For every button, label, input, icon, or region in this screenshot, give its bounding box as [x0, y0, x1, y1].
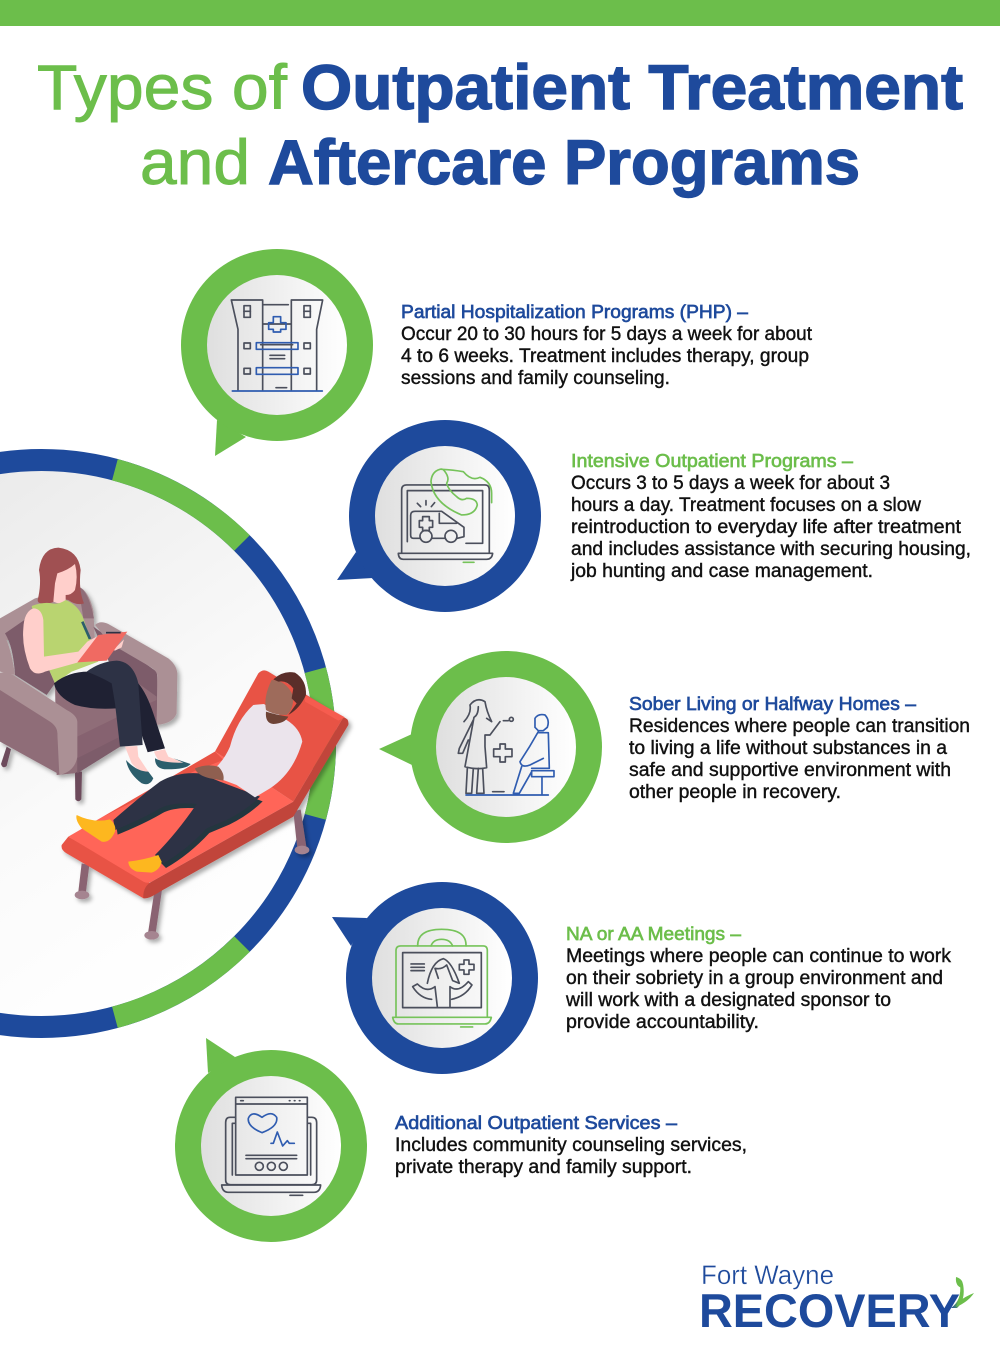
panel: partial hospitalization programs	[181, 249, 813, 456]
therapist figure	[23, 548, 191, 784]
text: additional services	[395, 1112, 747, 1178]
text: IOP	[570, 450, 971, 582]
text: PHP: Partial Hospitalization Programs (PHP) –	[401, 301, 749, 322]
chaise lounge	[62, 670, 348, 940]
icon: laptop with telehealth counselor	[393, 929, 491, 1027]
patient figure	[76, 672, 306, 873]
logo: Fort Wayne Recovery: Fort Wayne	[701, 1260, 834, 1290]
speech bubble: blue	[332, 882, 538, 1074]
panel: additional outpatient services	[175, 1038, 747, 1242]
text: IOP: Intensive Outpatient Programs –	[571, 450, 854, 471]
top banner bar	[0, 0, 1000, 26]
logo: Fort Wayne Recovery	[699, 1260, 974, 1337]
text: IOP: hours a day. Treatment focuses on a slow	[571, 495, 921, 516]
text: sober living	[629, 693, 970, 803]
icon: hospital building	[231, 300, 323, 391]
text: IOP: reintroduction to everyday life after treatment	[571, 517, 962, 538]
title	[37, 53, 963, 198]
armchair	[0, 587, 177, 801]
illustration: patient on chaise lounge	[62, 670, 348, 940]
speech bubble: blue	[337, 420, 541, 612]
text: sober living: safe and supportive environment with	[629, 760, 951, 781]
title: Types of	[37, 53, 288, 123]
text: IOP: Occurs 3 to 5 days a week for about 3	[571, 473, 890, 494]
icon: doctor and seated patient	[458, 700, 554, 795]
text: PHP: 4 to 6 weeks. Treatment includes therapy, group	[401, 346, 809, 367]
panel: intensive outpatient programs	[337, 420, 971, 612]
title: Aftercare Programs	[268, 128, 860, 198]
panel: large therapy circle	[0, 460, 348, 1027]
panel: NA or AA meetings	[332, 882, 951, 1074]
text: NA or AA	[565, 923, 951, 1033]
text: additional services: private therapy and family support.	[395, 1157, 692, 1178]
text: NA or AA: provide accountability.	[566, 1012, 759, 1033]
panel: sober living or halfway homes	[379, 651, 970, 843]
icon: sprout leaf	[951, 1277, 974, 1308]
text: sober living: Residences where people can transition	[629, 716, 970, 737]
text: sober living: Sober Living or Halfway Homes –	[629, 693, 917, 714]
text: PHP	[401, 301, 813, 389]
text: NA or AA: will work with a designated sponsor to	[565, 990, 891, 1011]
text: PHP: Occur 20 to 30 hours for 5 days a week for about	[401, 324, 813, 345]
text: PHP: sessions and family counseling.	[401, 368, 670, 389]
segmented ring	[0, 460, 325, 1027]
text: NA or AA: on their sobriety in a group environment and	[566, 968, 943, 989]
text: sober living: other people in recovery.	[629, 782, 841, 803]
text: additional services: Includes community counseling services,	[395, 1135, 747, 1156]
text: NA or AA: Meetings where people can continue to work	[566, 946, 951, 967]
illustration: therapist in armchair	[0, 548, 191, 801]
icon: laptop with heart monitor	[222, 1097, 321, 1195]
text: IOP: and includes assistance with securing housing,	[571, 539, 971, 560]
logo: Fort Wayne Recovery: RECOVERY	[699, 1284, 960, 1337]
text: additional services: Additional Outpatient Services –	[395, 1112, 678, 1133]
title: and	[140, 128, 250, 198]
speech bubble: green	[175, 1038, 367, 1242]
text: NA or AA: NA or AA Meetings –	[566, 923, 742, 944]
speech bubble: green	[181, 249, 373, 456]
speech bubble: green	[379, 651, 602, 843]
icon: laptop with ambulance and phone	[398, 469, 493, 562]
title: Outpatient Treatment	[301, 53, 963, 123]
text: sober living: to living a life without substances in a	[629, 738, 947, 759]
text: IOP: job hunting and case management.	[570, 561, 873, 582]
